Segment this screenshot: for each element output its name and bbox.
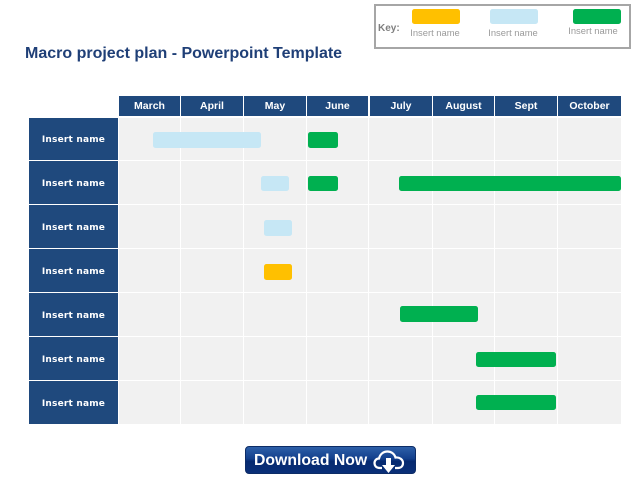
key swatch: amber: [412, 9, 460, 24]
month: April: April: [200, 100, 224, 112]
bar: row 4 amber: [264, 264, 292, 280]
gantt grid background: [119, 118, 621, 424]
bar: row 1 green: [308, 132, 338, 148]
row label 6: Insert name: [42, 355, 105, 365]
row label 2: [29, 161, 118, 204]
month: April: [181, 96, 243, 116]
month: March: [119, 96, 180, 116]
bar: row 6 green: [476, 352, 556, 367]
bar: row 2 light blue: [261, 176, 289, 191]
month: May: May: [265, 100, 285, 112]
legend key: [374, 4, 631, 49]
row label 4: [29, 249, 118, 292]
row label 1: Insert name: [42, 135, 105, 145]
row label 4: Insert name: [42, 267, 105, 277]
row label 5: [29, 293, 118, 336]
month: August: [433, 96, 494, 116]
month: March: March: [134, 100, 165, 112]
row label 2: Insert name: [42, 179, 105, 189]
bar: row 5 green: [400, 306, 478, 322]
bar: row 2 green long: [399, 176, 621, 191]
month: August: August: [445, 100, 482, 112]
bar: row 7 green: [476, 395, 556, 410]
button text: Download Now: [254, 452, 367, 469]
key label: light blue: Insert name: [488, 27, 538, 38]
bar: row 1 light blue: [153, 132, 261, 148]
row label 7: Insert name: [42, 399, 105, 409]
icon: cloud download: [373, 450, 404, 473]
row label 1: [29, 118, 118, 160]
row label 5: Insert name: [42, 311, 105, 321]
month: July: July: [390, 100, 412, 112]
title: Macro project plan - Powerpoint Template: [25, 45, 342, 62]
month: October: [558, 96, 621, 116]
row label 3: [29, 205, 118, 248]
row label 3: Insert name: [42, 223, 105, 233]
month: October: October: [569, 100, 610, 112]
month: Sept: Sept: [515, 100, 537, 112]
download button: [245, 446, 416, 474]
row label 7: [29, 381, 118, 424]
row label 6: [29, 337, 118, 380]
key swatch: light blue: [490, 9, 538, 24]
month: June: [307, 96, 368, 116]
key heading: Key:: [378, 23, 400, 34]
key swatch: green: [573, 9, 621, 24]
month: Sept: [495, 96, 557, 116]
bar: row 2 green short: [308, 176, 338, 191]
grid lines: [119, 118, 621, 424]
month: May: [244, 96, 306, 116]
key label: amber: Insert name: [410, 27, 460, 38]
month: July: [370, 96, 432, 116]
month: June: June: [325, 100, 350, 112]
key label: green: Insert name: [568, 25, 618, 36]
bar: row 3 light blue: [264, 220, 292, 236]
month header: [119, 96, 621, 116]
